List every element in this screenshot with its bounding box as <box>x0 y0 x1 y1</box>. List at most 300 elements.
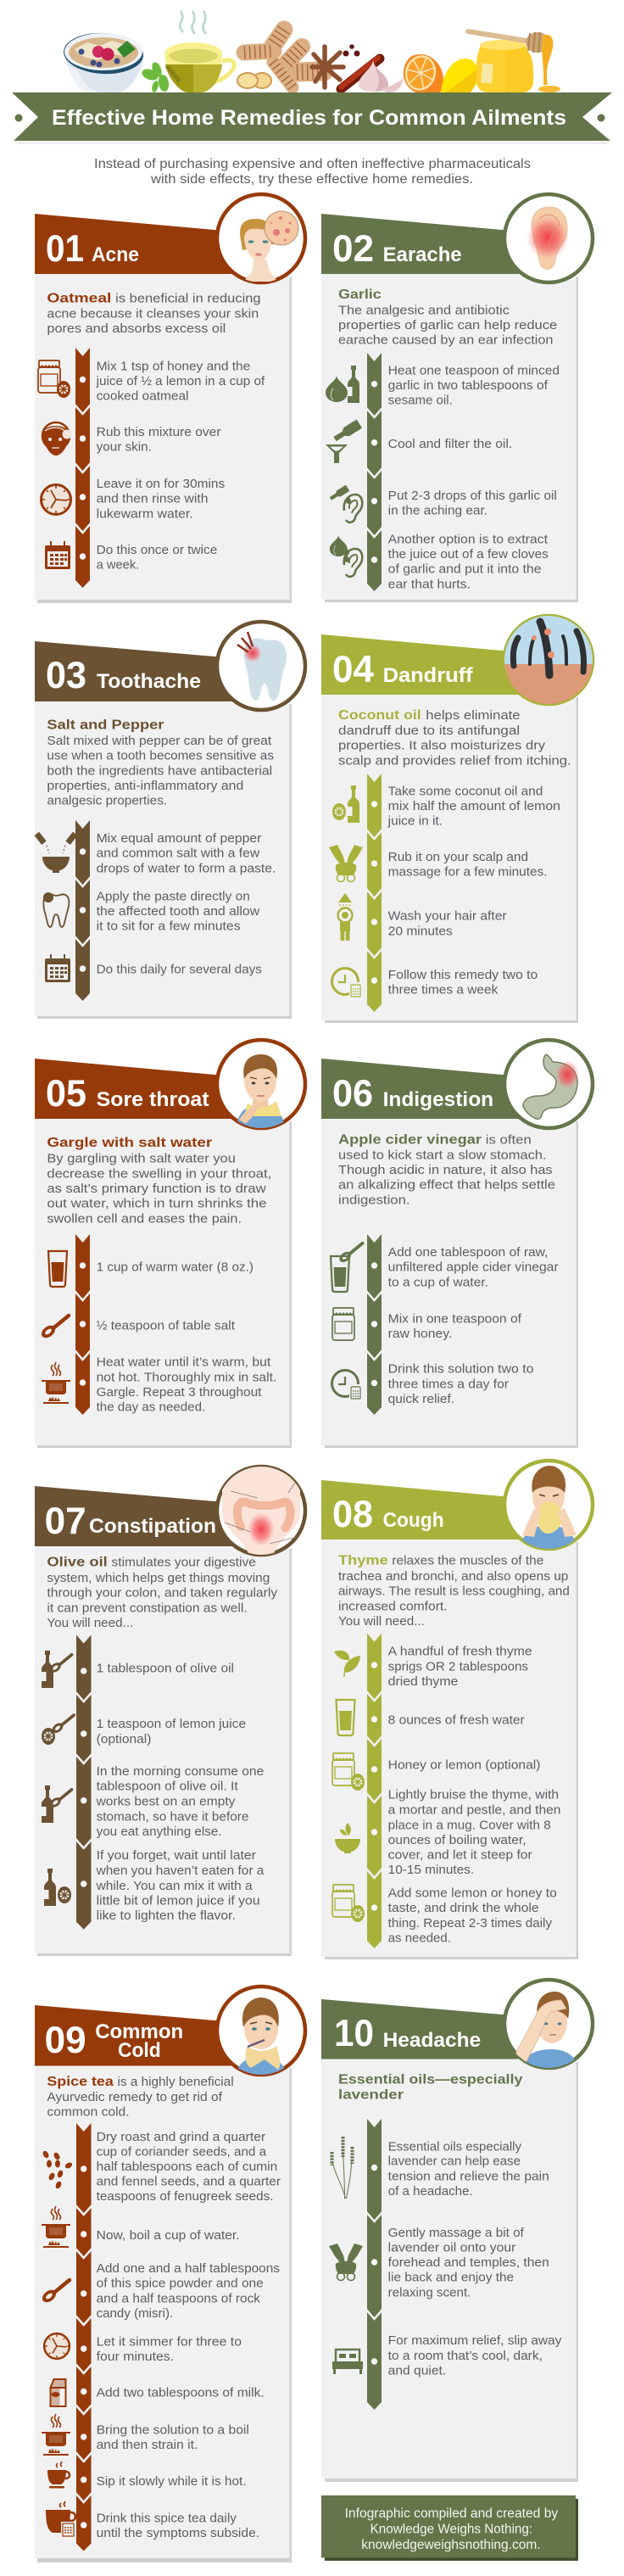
step 4 text: cover, and let it steep for <box>388 1847 532 1863</box>
number and title: 06 <box>332 1073 373 1115</box>
step 3 text: Gargle. Repeat 3 throughout <box>97 1385 262 1400</box>
remedy description: an alkalizing effect that helps settle <box>338 1178 555 1193</box>
step 4 text: Do this once or twice <box>97 543 217 557</box>
number and title: 08 <box>332 1494 373 1535</box>
step 3 text: and then rinse with <box>97 492 208 506</box>
number and title: Indigestion <box>383 1088 493 1111</box>
step 1 text: and fennel seeds, and a quarter <box>97 2175 281 2189</box>
step 2 text: Cool and filter the oil. <box>388 437 512 451</box>
number and title <box>45 1500 216 1542</box>
icon: bottle and spoon <box>41 1651 72 1688</box>
remedy description: You will need... <box>338 1614 425 1629</box>
step 3 text: Leave it on for 30mins <box>97 477 225 491</box>
illustration: peppercorns <box>343 44 359 56</box>
remedy description: The analgesic and antibiotic <box>338 303 510 317</box>
step 3 text: Wash your hair after <box>388 909 507 924</box>
title text: Effective Home Remedies for Common Ailments <box>52 106 566 130</box>
icon: spoon <box>40 2280 70 2305</box>
remedy description <box>47 1556 278 1630</box>
step 3 text: Add one and a half tablespoons <box>97 2261 280 2276</box>
number and title: Toothache <box>97 670 201 693</box>
step 2 text: Rub it on your scalp and <box>388 850 528 864</box>
remedy description: properties. It also moisturizes dry <box>338 739 546 753</box>
step 3 text: candy (misri). <box>97 2306 173 2321</box>
remedy description: properties of garlic can help reduce <box>338 318 557 332</box>
panel 08: Cough <box>321 1461 593 1959</box>
number and title: 04 <box>332 649 374 690</box>
step 4 text: If you forget, wait until later <box>97 1848 256 1863</box>
step 2 text: your skin. <box>97 440 152 455</box>
step 1 text <box>388 2139 549 2199</box>
remedy description: stimulates your digestive <box>112 1556 256 1570</box>
number and title <box>45 2020 183 2062</box>
icon: scalp massage <box>329 845 363 882</box>
icon: glass of water <box>48 1251 67 1287</box>
icon: clock and calendar <box>332 969 362 997</box>
number and title <box>46 655 201 696</box>
step 1 text: 1 tablespoon of olive oil <box>97 1661 234 1675</box>
step 1 text <box>97 2130 281 2204</box>
step 1 text: cooked oatmeal <box>97 389 188 404</box>
step 3 text <box>97 2261 280 2321</box>
step 3 text: In the morning consume one <box>97 1764 264 1779</box>
step 1 text: Mix equal amount of pepper <box>97 831 261 846</box>
step 2 text: lie back and enjoy the <box>388 2271 514 2285</box>
footer credit text <box>345 2506 558 2552</box>
step 5 text: Add two tablespoons of milk. <box>97 2386 265 2400</box>
step 3 text: works best on an empty <box>96 1795 236 1809</box>
icon: honey jar <box>332 1308 354 1340</box>
icon: teacup <box>47 2461 70 2489</box>
step 3 text: quick relief. <box>388 1392 454 1406</box>
step 2 text <box>388 1311 522 1341</box>
intro text: Instead of purchasing expensive and often ineffective pharmaceuticals <box>94 157 531 171</box>
number and title: Earache <box>383 243 462 266</box>
remedy description <box>338 1132 555 1207</box>
card body <box>35 1544 292 1956</box>
header band <box>321 1999 543 2059</box>
step 3 text: tablespoon of olive oil. It <box>97 1780 239 1794</box>
step 1 text: juice of ½ a lemon in a cup of <box>96 374 265 388</box>
icon: pot on stove <box>42 2414 70 2456</box>
step 2 text <box>97 1717 246 1746</box>
step 5 text <box>388 1886 557 1945</box>
step 1 text: cup of coriander seeds, and a <box>97 2145 267 2160</box>
remedy description: Though acidic in nature, it also has <box>338 1163 553 1177</box>
step 1 text <box>96 359 265 404</box>
number and title <box>332 649 474 690</box>
icon: honey jar and lemon <box>38 360 70 398</box>
header band <box>321 1059 543 1119</box>
step 3 text: not hot. Thoroughly mix in salt. <box>97 1370 276 1384</box>
icon: oil drops into ear <box>329 485 362 522</box>
icon: garlic and sesame oil <box>326 366 359 403</box>
step 4 text: while. You can mix it with a <box>96 1879 253 1893</box>
step 1 text: mix half the amount of lemon <box>388 799 560 813</box>
icon: forehead massage <box>329 2244 363 2280</box>
intro text <box>94 157 531 187</box>
step 3 text: Drink this solution two to <box>388 1362 534 1377</box>
number and title: 09 <box>45 2020 86 2061</box>
step 2 text: 1 teaspoon of lemon juice <box>97 1717 246 1731</box>
step 2 text <box>97 889 259 934</box>
number and title: 02 <box>332 228 374 270</box>
icon: milk carton <box>51 2379 66 2406</box>
card body <box>321 1116 578 1448</box>
step 1 text: lavender can help ease <box>388 2154 521 2169</box>
icon: paste on tooth <box>43 892 69 927</box>
step 6 text <box>97 2423 249 2452</box>
remedy description: is often <box>486 1132 532 1147</box>
step 1 text <box>97 831 276 875</box>
step 4 text: a mortar and pestle, and then <box>388 1803 561 1818</box>
icon: herbs in bowl <box>335 1823 360 1853</box>
icon: salt and pepper into bowl <box>35 832 77 873</box>
number and title <box>46 1073 209 1115</box>
circle image: hair follicles with dandruff <box>504 616 593 707</box>
step 4 text: a week. <box>97 558 139 573</box>
step 1 text: of a headache. <box>388 2184 473 2199</box>
remedy description: helps eliminate <box>426 708 521 723</box>
icon: pot on stove <box>42 1362 70 1404</box>
step arrow column <box>366 1634 382 1948</box>
illustration: cup of green tea <box>164 11 234 92</box>
remedy description <box>47 1136 271 1226</box>
step 1 text: half tablespoons each of cumin <box>97 2160 277 2174</box>
step arrow column <box>366 774 382 1012</box>
step 4 text: the juice out of a few cloves <box>388 547 549 562</box>
number and title: Common <box>95 2020 183 2043</box>
step 3 text <box>388 1362 534 1406</box>
step 3 text <box>388 2333 562 2378</box>
remedy description: lavender <box>338 2087 404 2102</box>
step 3 text: to a room that’s cool, dark, <box>388 2349 543 2363</box>
step 5 text: as needed. <box>388 1931 451 1945</box>
header band <box>35 2005 254 2066</box>
intro text: with side effects, try these effective home remedies. <box>150 172 473 187</box>
footer credit text: knowledgeweighsnothing.com. <box>361 2538 541 2552</box>
step 4 text: Lightly bruise the thyme, with <box>388 1788 559 1802</box>
number and title: Dandruff <box>383 664 474 687</box>
icon: spoon <box>39 1316 69 1340</box>
step 1 text: drops of water to form a paste. <box>97 861 276 875</box>
header band <box>35 214 254 274</box>
step 3 text: stomach, so have it before <box>97 1809 248 1824</box>
remedy description <box>47 291 261 336</box>
icon: pouring oil into funnel <box>326 419 362 463</box>
footer credit text: Infographic compiled and created by <box>345 2506 558 2521</box>
step 2 text: Rub this mixture over <box>97 425 221 439</box>
step arrow column <box>75 348 91 588</box>
step 1 text: sprigs OR 2 tablespoons <box>388 1659 528 1674</box>
step 3 text: Do this daily for several days <box>97 963 262 977</box>
remedy description: Olive oil <box>47 1556 108 1570</box>
header illustration: food ingredients <box>63 11 560 94</box>
card body <box>321 692 578 1023</box>
icon: bottle and spoon <box>41 1785 72 1823</box>
step 7 text: Sip it slowly while it is hot. <box>97 2474 247 2489</box>
remedy description: Ayurvedic remedy to get rid of <box>47 2090 223 2104</box>
step 1 text: Take some coconut oil and <box>388 784 543 798</box>
remedy description: Oatmeal <box>47 291 111 305</box>
step 1 text <box>388 1245 559 1289</box>
step 3 text: the day as needed. <box>97 1400 205 1415</box>
header band <box>35 1486 254 1546</box>
remedy description <box>338 288 557 348</box>
remedy description: Spice tea <box>47 2075 114 2089</box>
circle image: abdomen with colon <box>217 1466 305 1557</box>
number and title <box>332 1073 493 1115</box>
icon: cup and calendar <box>46 2501 75 2538</box>
step 2 text: raw honey. <box>388 1327 452 1341</box>
step 4 text: Another option is to extract <box>388 532 549 546</box>
step 1 text: 1 cup of warm water (8 oz.) <box>97 1260 254 1274</box>
icon: face mask <box>42 422 71 455</box>
number and title <box>334 2013 481 2054</box>
step 1 text: tension and relieve the pain <box>388 2169 549 2183</box>
number and title: Constipation <box>89 1515 216 1538</box>
remedy description: through your colon, and taken regularly <box>47 1586 278 1601</box>
remedy description <box>47 2075 234 2119</box>
step 2 text <box>388 2226 549 2299</box>
card body <box>321 2057 578 2482</box>
icon: glass of water <box>336 1700 354 1735</box>
step 3 text: lukewarm water. <box>97 506 193 521</box>
panel 06: Indigestion <box>321 1040 593 1448</box>
step arrow column <box>75 1635 92 1930</box>
icon: thyme leaf <box>334 1651 360 1677</box>
step 1 text <box>387 784 560 829</box>
step 1 text: garlic in two tablespoons of <box>388 378 549 393</box>
step 4 text <box>96 1848 265 1923</box>
number and title: Headache <box>383 2029 481 2052</box>
icon: calendar <box>45 541 70 569</box>
step 2 text: Now, boil a cup of water. <box>97 2228 240 2243</box>
step 4 text: like to lighten the flavor. <box>97 1908 236 1923</box>
card body <box>35 1116 292 1448</box>
footer credit text: Knowledge Weighs Nothing: <box>370 2522 532 2536</box>
icon: lemon and spoon <box>42 1715 74 1745</box>
step 2 text: Mix in one teaspoon of <box>388 1311 522 1326</box>
panel 10: Headache <box>321 1980 593 2482</box>
remedy description: Coconut oil <box>338 708 421 723</box>
step 4 text: Let it simmer for three to <box>97 2335 242 2350</box>
step 6 text: Bring the solution to a boil <box>97 2423 249 2438</box>
step 2 text: the affected tooth and allow <box>97 904 259 919</box>
step 3 text: in the aching ear. <box>388 504 488 518</box>
remedy description: properties, anti-inflammatory and <box>47 779 243 793</box>
step 1 text: Add one tablespoon of raw, <box>388 1245 548 1260</box>
remedy description: decrease the swelling in your throat, <box>47 1166 271 1181</box>
circle image: boy coughing into cloth <box>504 1461 593 1552</box>
card body <box>321 271 578 602</box>
step 5 text: Add some lemon or honey to <box>388 1886 557 1901</box>
step 2 text: Gently massage a bit of <box>388 2226 525 2240</box>
step arrow column <box>75 820 91 1001</box>
remedy description: used to kick start a slow stomach. <box>338 1148 546 1162</box>
remedy description: earache caused by an ear infection <box>338 333 553 348</box>
remedy description: By gargling with salt water you <box>47 1152 236 1166</box>
panel 05: Sore throat <box>35 1040 305 1448</box>
step 3 text <box>388 489 557 518</box>
card body <box>35 2063 292 2562</box>
step 2 text: 8 ounces of fresh water <box>388 1713 525 1727</box>
step 6 text: and then strain it. <box>97 2438 198 2452</box>
circle image: boy with thermometer and scarf <box>217 1986 305 2078</box>
icon: pot on stove <box>42 2206 70 2248</box>
number and title <box>46 228 139 270</box>
remedy description: Salt and Pepper <box>47 718 164 732</box>
number and title: Cough <box>383 1509 444 1532</box>
step 1 text: unfiltered apple cider vinegar <box>388 1260 559 1275</box>
step 4 text: four minutes. <box>97 2350 174 2364</box>
step 1 text: A handful of fresh thyme <box>388 1644 532 1659</box>
step 8 text: until the symptoms subside. <box>97 2526 259 2540</box>
panel 07: Constipation <box>35 1466 305 1956</box>
number and title: Cold <box>118 2039 161 2062</box>
icon: oil bottle and lemon <box>332 785 359 823</box>
step 4 text <box>97 2335 242 2364</box>
remedy description: dandruff due to its antifungal <box>338 724 520 738</box>
icon: spice seeds <box>42 2150 73 2189</box>
icon: honey jar and lemon <box>332 1753 365 1791</box>
illustration: mint leaves <box>141 61 170 93</box>
step 3 text <box>97 477 225 521</box>
remedy description: indigestion. <box>338 1193 410 1207</box>
step 8 text: Drink this spice tea daily <box>97 2512 237 2526</box>
remedy description: Gargle with salt water <box>47 1136 212 1150</box>
step 4 text: ear that hurts. <box>388 577 471 591</box>
illustration: star anise <box>312 47 343 87</box>
panel 09: Common Cold <box>35 1986 305 2562</box>
icon: clock <box>41 485 71 514</box>
step 3 text <box>97 1355 276 1415</box>
icon: spoon and glass <box>331 1243 363 1292</box>
step 3 text: 20 minutes <box>388 924 453 938</box>
circle image: woman with acne <box>217 194 305 282</box>
step arrow column <box>75 1234 91 1415</box>
remedy description: is beneficial in reducing <box>115 291 261 305</box>
illustration: oatmeal bowl <box>63 31 144 92</box>
number and title: Sore throat <box>97 1088 209 1111</box>
step 3 text <box>388 909 507 938</box>
number and title: 01 <box>46 228 84 270</box>
step 4 text <box>388 1788 561 1877</box>
icon: lavender <box>332 2137 353 2199</box>
step 1 text: to a cup of water. <box>388 1275 488 1289</box>
remedy description: Salt mixed with pepper can be of great <box>47 734 272 748</box>
step 4 text: three times a week <box>388 983 499 997</box>
step arrow column <box>366 353 382 591</box>
illustration: lemon <box>441 59 479 92</box>
step 1 text: teaspoons of fenugreek seeds. <box>97 2189 273 2204</box>
step 1 text: juice in it. <box>387 814 443 829</box>
step 1 text: sesame oil. <box>388 394 453 408</box>
step arrow column <box>366 1234 382 1415</box>
remedy description: airways. The result is less coughing, and <box>338 1584 570 1599</box>
remedy description: out water, which in turn shrinks the <box>47 1197 267 1211</box>
step 4 text: place in a mug. Cover with 8 <box>388 1818 551 1832</box>
number and title: 07 <box>45 1500 86 1542</box>
remedy description: it can prevent constipation as well. <box>47 1601 248 1616</box>
step 3 text: of this spice powder and one <box>97 2277 264 2291</box>
step 3 text: For maximum relief, slip away <box>388 2333 562 2348</box>
step 2 text: it to sit for a few minutes <box>97 919 241 934</box>
step 3 text: you eat anything else. <box>97 1824 221 1839</box>
circle image: aching tooth <box>217 622 305 710</box>
step 3 text: and a half teaspoons of rock <box>97 2291 261 2305</box>
icon: calendar <box>45 954 70 982</box>
remedy description: Garlic <box>338 288 382 302</box>
circle image: boy with sore throat <box>217 1040 305 1128</box>
step 5 text: taste, and drink the whole <box>388 1901 539 1915</box>
remedy description: is a highly beneficial <box>117 2075 234 2089</box>
remedy description: relaxes the muscles of the <box>392 1554 543 1568</box>
step 2 text: (optional) <box>97 1732 151 1746</box>
step 2 text: lavender oil onto your <box>388 2240 515 2255</box>
step 1 text: Essential oils especially <box>388 2139 521 2154</box>
step 3 text <box>96 1764 264 1839</box>
remedy description: both the ingredients have antibacterial <box>47 763 272 778</box>
remedy description: increased comfort. <box>338 1599 448 1613</box>
remedy description <box>338 1554 570 1629</box>
step 2 text: ½ teaspoon of table salt <box>97 1318 236 1333</box>
icon: honey jar and lemon <box>332 1885 365 1922</box>
remedy description: You will need... <box>47 1616 133 1630</box>
remedy description: swollen cell and eases the pain. <box>47 1211 242 1226</box>
step 3 text: Honey or lemon (optional) <box>388 1757 541 1773</box>
step 8 text <box>97 2512 259 2540</box>
step 5 text: thing. Repeat 2-3 times daily <box>388 1916 553 1931</box>
illustration: garlic <box>359 60 404 92</box>
panel 04: Dandruff <box>321 616 593 1023</box>
panel 01: Acne <box>35 194 305 603</box>
remedy description: as salt’s primary function is to draw <box>47 1182 266 1196</box>
icon: bed <box>332 2350 363 2374</box>
remedy description: use when a tooth becomes sensitive as <box>47 749 274 763</box>
circle image: boy holding forehead <box>504 1980 593 2071</box>
remedy description: analgesic properties. <box>47 794 167 808</box>
number and title <box>332 1494 444 1535</box>
step 1 text: Mix 1 tsp of honey and the <box>97 359 250 373</box>
step 1 text <box>388 363 560 408</box>
remedy description: trachea and bronchi, and also opens up <box>338 1569 568 1584</box>
footer credit box <box>321 2495 578 2561</box>
remedy description: Essential oils—especially <box>338 2073 523 2087</box>
step 3 text: Put 2-3 drops of this garlic oil <box>388 489 557 503</box>
remedy description <box>338 2073 523 2102</box>
illustration: honey jar with dipper <box>468 31 560 92</box>
remedy description: pores and absorbs excess oil <box>47 321 226 336</box>
step 4 text: when you haven’t eaten for a <box>96 1864 265 1878</box>
number and title: 10 <box>334 2013 374 2054</box>
illustration: orange half <box>401 52 443 94</box>
step 3 text: Heat water until it’s warm, but <box>97 1355 271 1370</box>
step 1 text <box>388 1644 532 1689</box>
icon: clock <box>44 2333 70 2359</box>
header band <box>35 641 254 701</box>
step 2 text: massage for a few minutes. <box>388 865 548 880</box>
remedy description: scalp and provides relief from itching. <box>338 753 571 768</box>
title banner <box>12 92 612 144</box>
panel 02: Earache <box>321 194 593 602</box>
remedy description: Apple cider vinegar <box>338 1132 482 1147</box>
step 2 text: relaxing scent. <box>388 2285 471 2299</box>
circle image: stomach with red spot <box>504 1040 593 1128</box>
card body <box>35 699 292 1019</box>
step 1 text: and common salt with a few <box>97 847 259 861</box>
remedy description <box>338 708 571 768</box>
